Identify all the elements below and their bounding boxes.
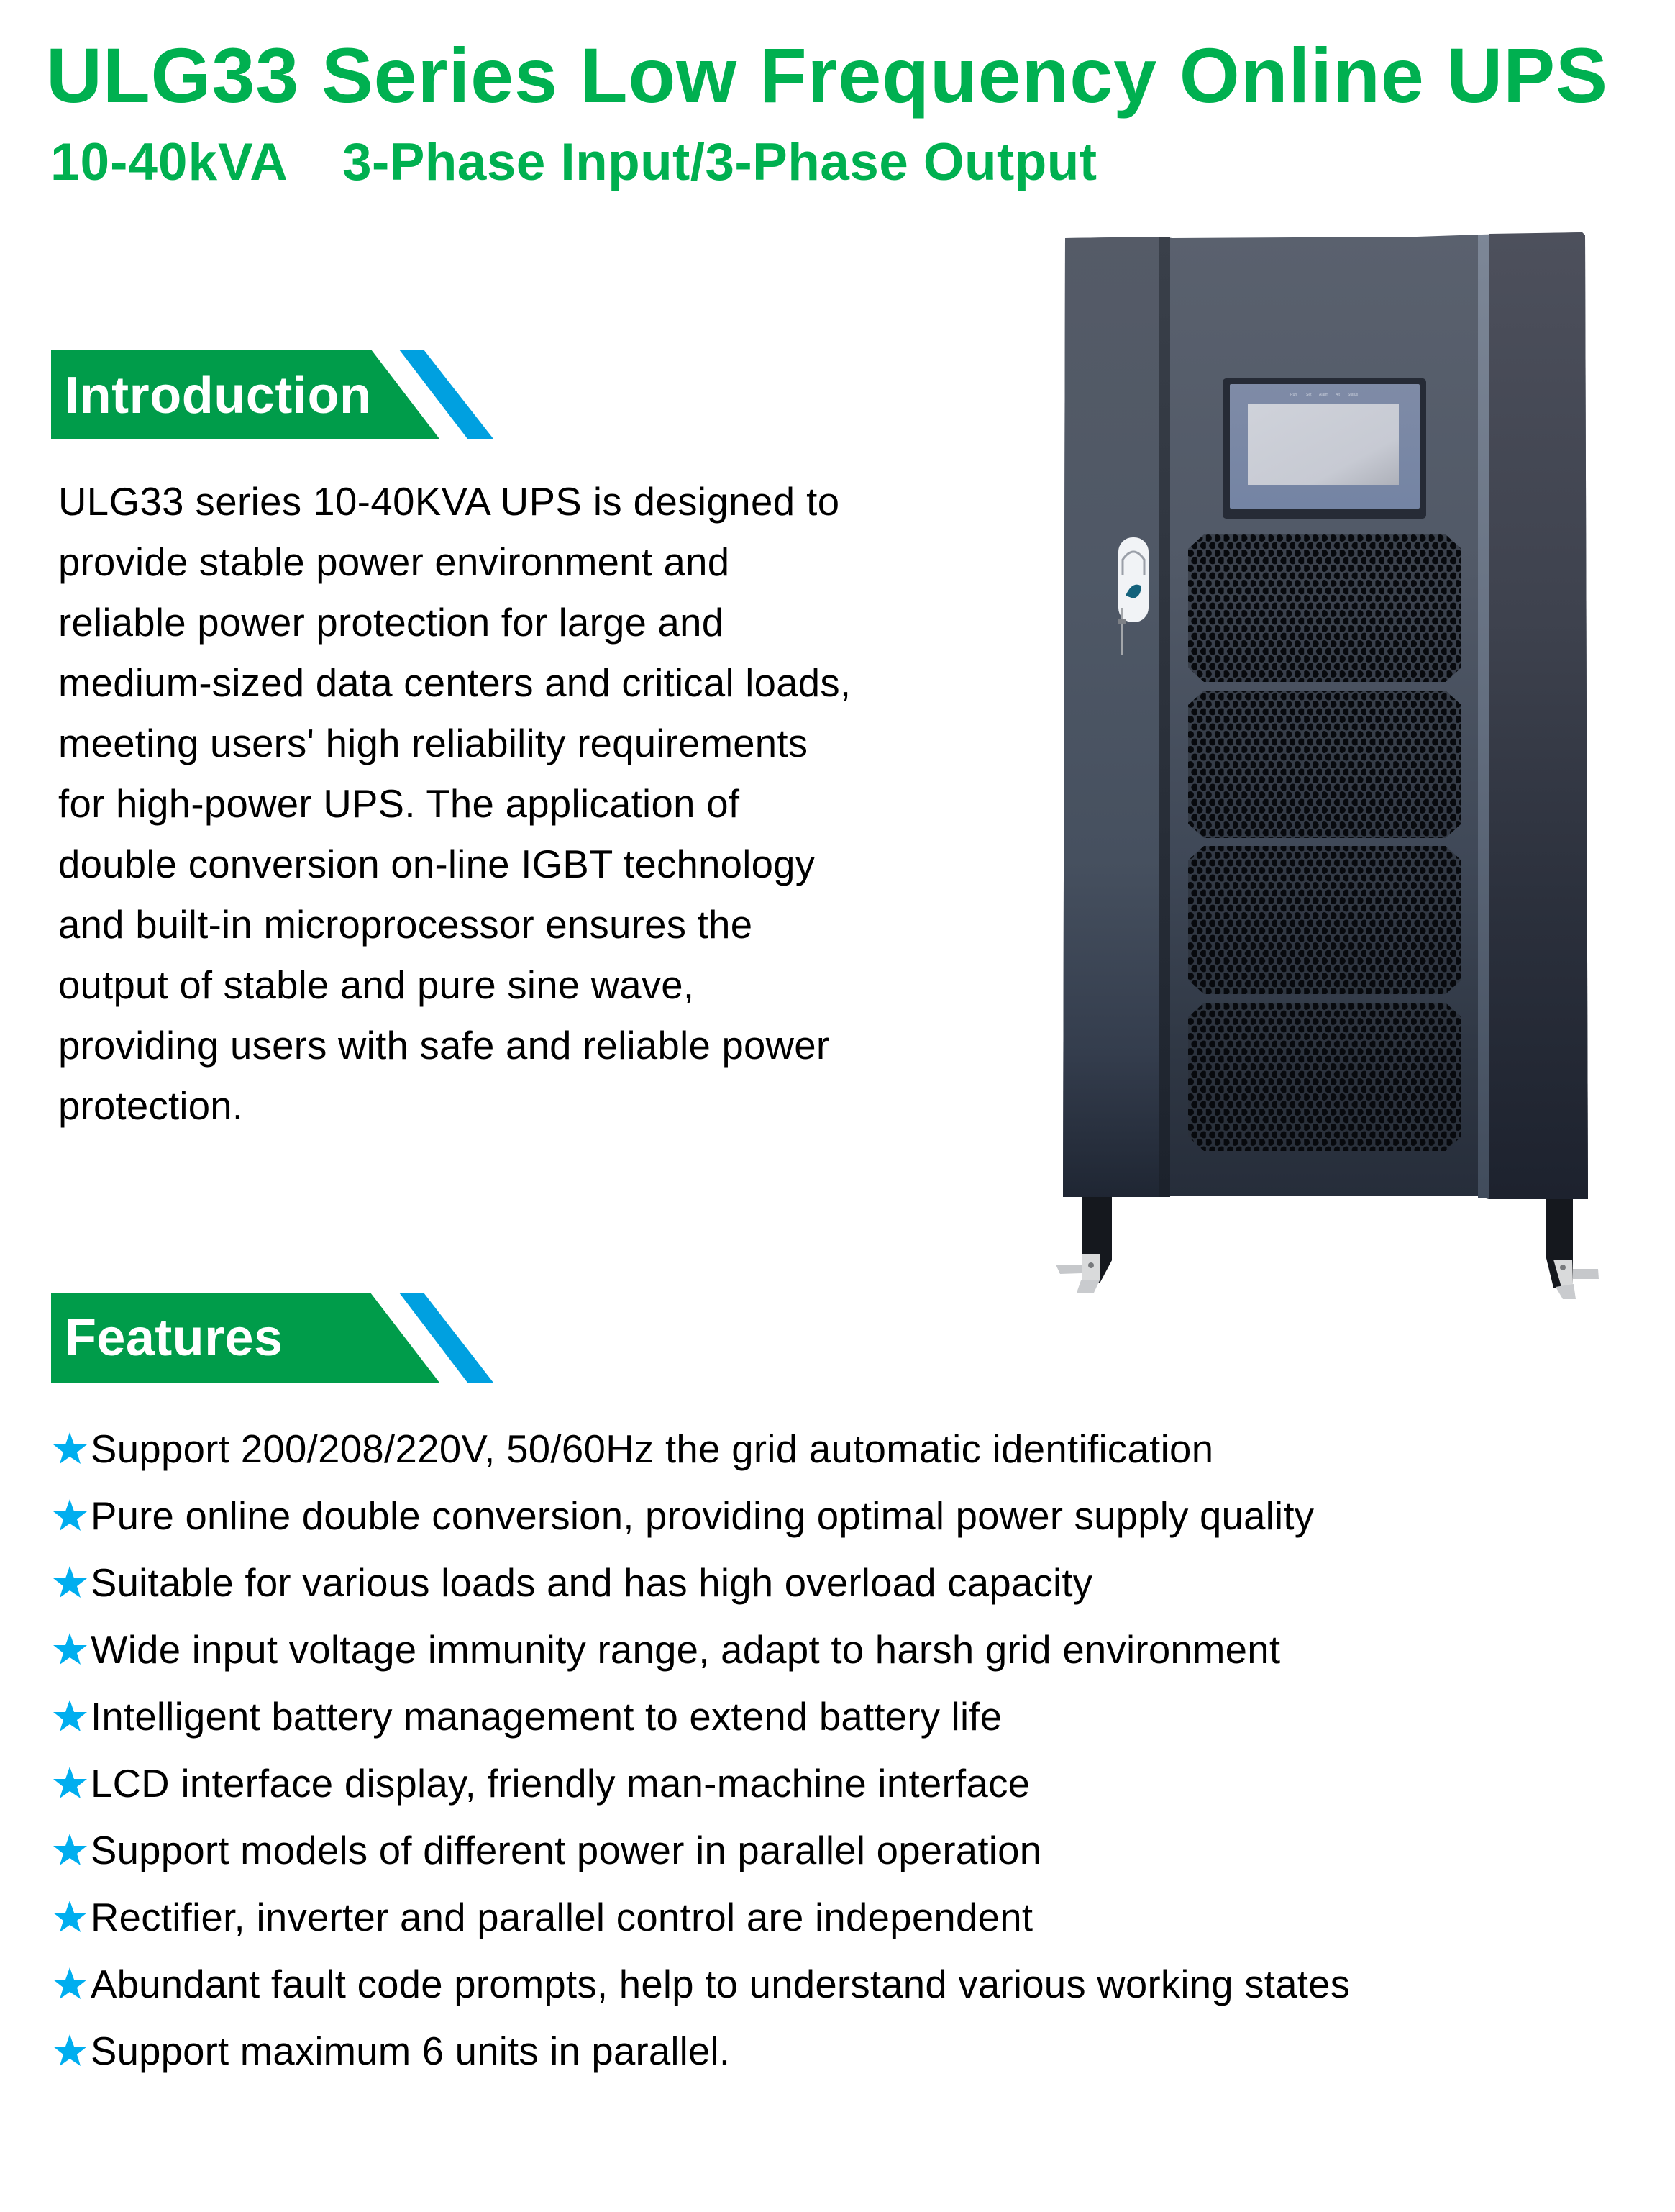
feature 6: LCD interface display, friendly man-machine interface bbox=[91, 1762, 1030, 1806]
feature 4: Wide input voltage immunity range, adapt to harsh grid environment bbox=[91, 1628, 1280, 1672]
feature 10: Support maximum 6 units in parallel. bbox=[91, 2029, 730, 2073]
vent grille 2 bbox=[1188, 691, 1461, 838]
touch screen: Set bbox=[1306, 393, 1312, 397]
text block: introduction: output of stable and pure sine wave, bbox=[58, 963, 694, 1007]
text block: introduction: medium-sized data centers and critical loads, bbox=[58, 661, 851, 705]
heading: features: Features bbox=[65, 1309, 283, 1367]
vent grille 3 bbox=[1188, 846, 1461, 994]
product photo: UPS cabinet bbox=[1056, 232, 1599, 1299]
vent grille 1 bbox=[1188, 534, 1461, 682]
text block: introduction: reliable power protection for large and bbox=[58, 601, 724, 645]
text block: introduction: ULG33 series 10-40KVA UPS is designed to bbox=[58, 480, 839, 524]
vent grille 4 bbox=[1188, 1003, 1461, 1151]
touch screen: Run bbox=[1290, 393, 1297, 397]
right leg and bracket bbox=[1546, 1194, 1599, 1299]
subtitle: 10-40kVA bbox=[50, 133, 288, 191]
feature 2: Pure online double conversion, providing optimal power supply quality bbox=[91, 1494, 1315, 1538]
text block: introduction: protection. bbox=[58, 1084, 243, 1128]
touch screen: Alt bbox=[1336, 393, 1340, 397]
feature list bbox=[53, 1427, 1350, 2073]
text block: introduction: meeting users' high reliability requirements bbox=[58, 722, 808, 765]
heading: introduction bbox=[51, 350, 493, 439]
feature 8: Rectifier, inverter and parallel control are independent bbox=[91, 1895, 1033, 1939]
touch screen: Alarm bbox=[1319, 393, 1328, 397]
left leg and bracket bbox=[1056, 1194, 1112, 1293]
feature 5: Intelligent battery management to extend battery life bbox=[91, 1695, 1002, 1739]
feature 9: Abundant fault code prompts, help to understand various working states bbox=[91, 1962, 1350, 2006]
touch screen bbox=[1223, 378, 1426, 519]
feature 7: Support models of different power in parallel operation bbox=[91, 1829, 1041, 1872]
text block: introduction bbox=[58, 480, 851, 1128]
text block: introduction: provide stable power environment and bbox=[58, 540, 729, 584]
door lock and key bbox=[1118, 537, 1149, 655]
cabinet body bbox=[1063, 232, 1588, 1199]
text block: introduction: and built-in microprocessor ensures the bbox=[58, 903, 752, 947]
feature 1: Support 200/208/220V, 50/60Hz the grid automatic identification bbox=[91, 1427, 1213, 1471]
title: ULG33 Series Low Frequency Online UPS bbox=[46, 32, 1607, 119]
heading: features bbox=[51, 1293, 493, 1383]
text block: introduction: for high-power UPS. The application of bbox=[58, 782, 740, 826]
touch screen: Status bbox=[1348, 393, 1359, 397]
subtitle: 3-Phase Input/3-Phase Output bbox=[342, 133, 1097, 191]
text block: introduction: providing users with safe and reliable power bbox=[58, 1024, 829, 1068]
heading: introduction: Introduction bbox=[65, 367, 371, 424]
feature 3: Suitable for various loads and has high overload capacity bbox=[91, 1561, 1093, 1605]
text block: introduction: double conversion on-line IGBT technology bbox=[58, 842, 816, 886]
